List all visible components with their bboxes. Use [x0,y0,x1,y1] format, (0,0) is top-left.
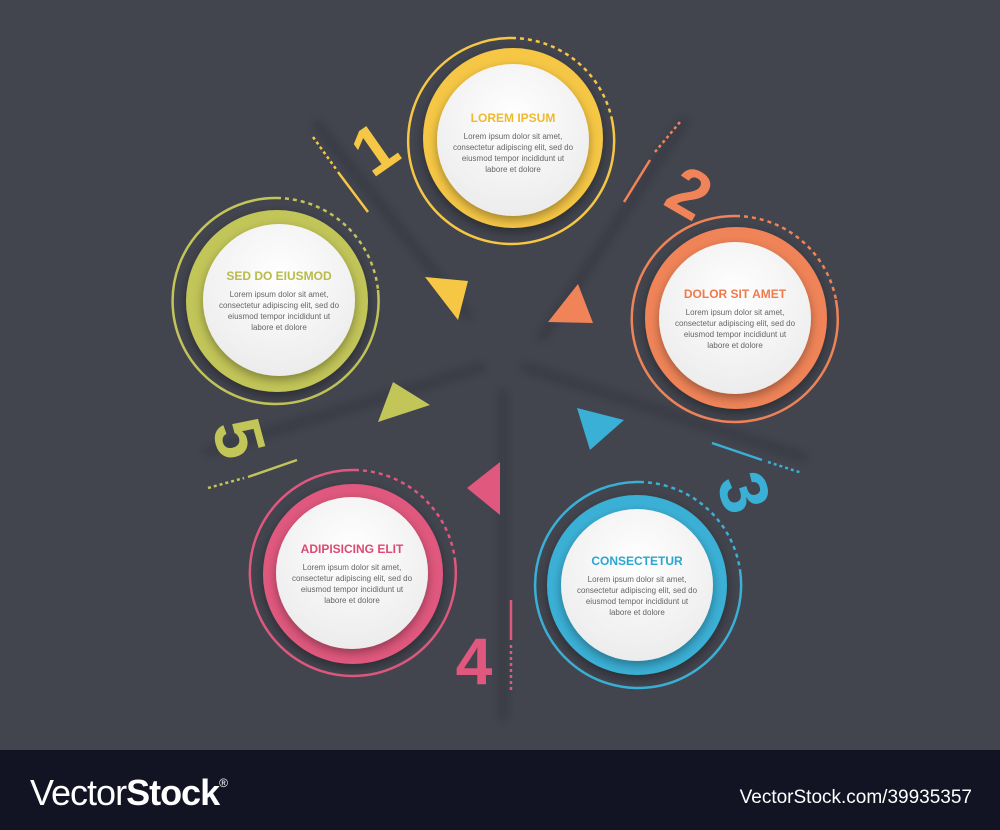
circle 5: Sed Do Eiusmod: consectetur adipiscing elit, sed do [219,301,340,310]
circle 5: Sed Do Eiusmod: Lorem ipsum dolor sit amet, [230,290,328,299]
footer bar: ® [219,776,228,790]
circle 4: Adipisicing Elit [250,470,456,676]
footer bar: VectorStock.com/39935357 [740,787,972,808]
circle 5: Sed Do Eiusmod: labore et dolore [251,323,307,332]
circle 4: Adipisicing Elit: consectetur adipiscing elit, sed do [292,574,413,583]
circle 2: Dolor Sit Amet: labore et dolore [707,341,763,350]
number 4 [456,600,511,698]
circle 2: Dolor Sit Amet: eiusmod tempor incididunt ut [684,330,787,339]
circle 4: Adipisicing Elit: ADIPISICING ELIT [301,542,404,556]
circle 4: Adipisicing Elit: eiusmod tempor incididunt ut [301,585,404,594]
number 5: 5 [197,410,280,466]
circle 2: Dolor Sit Amet [632,216,838,422]
number 5 [197,410,297,488]
circle 1: Lorem Ipsum: Lorem ipsum dolor sit amet, [464,132,562,141]
circle 1: Lorem Ipsum [408,38,614,244]
circle 4: Adipisicing Elit: labore et dolore [324,596,380,605]
circle 1: Lorem Ipsum: eiusmod tempor incididunt ut [462,154,565,163]
triangle markers [378,277,624,515]
circle 1: Lorem Ipsum: consectetur adipiscing elit, sed do [453,143,574,152]
circle 4: Adipisicing Elit: Lorem ipsum dolor sit amet, [303,563,401,572]
circle 3: Consectetur: eiusmod tempor incididunt ut [586,597,689,606]
number 2 [624,122,725,236]
footer bar [0,750,1000,830]
number 1 [313,107,412,212]
circle 2: Dolor Sit Amet: Lorem ipsum dolor sit amet, [686,308,784,317]
circle 3: Consectetur: consectetur adipiscing elit, sed do [577,586,698,595]
circle 5: Sed Do Eiusmod [173,198,379,404]
circle 3: Consectetur: labore et dolore [609,608,665,617]
number 4: 4 [456,624,493,698]
number 3 [702,443,802,522]
number 3: 3 [702,463,786,522]
blades: pinwheel panel edges with soft shadows [205,118,806,720]
circle 5: Sed Do Eiusmod: eiusmod tempor incididunt ut [228,312,331,321]
circle 1: Lorem Ipsum: labore et dolore [485,165,541,174]
number 2: 2 [654,151,725,236]
circle 5: Sed Do Eiusmod: SED DO EIUSMOD [226,269,332,283]
circle 3: Consectetur [535,482,741,688]
circle 2: Dolor Sit Amet: consectetur adipiscing elit, sed do [675,319,796,328]
number 1: 1 [338,107,412,191]
circle 3: Consectetur: CONSECTETUR [591,554,683,568]
circle 2: Dolor Sit Amet: DOLOR SIT AMET [684,287,787,301]
circle 3: Consectetur: Lorem ipsum dolor sit amet, [588,575,686,584]
footer bar: VectorStock [30,772,219,813]
circle 1: Lorem Ipsum: LOREM IPSUM [471,111,555,125]
